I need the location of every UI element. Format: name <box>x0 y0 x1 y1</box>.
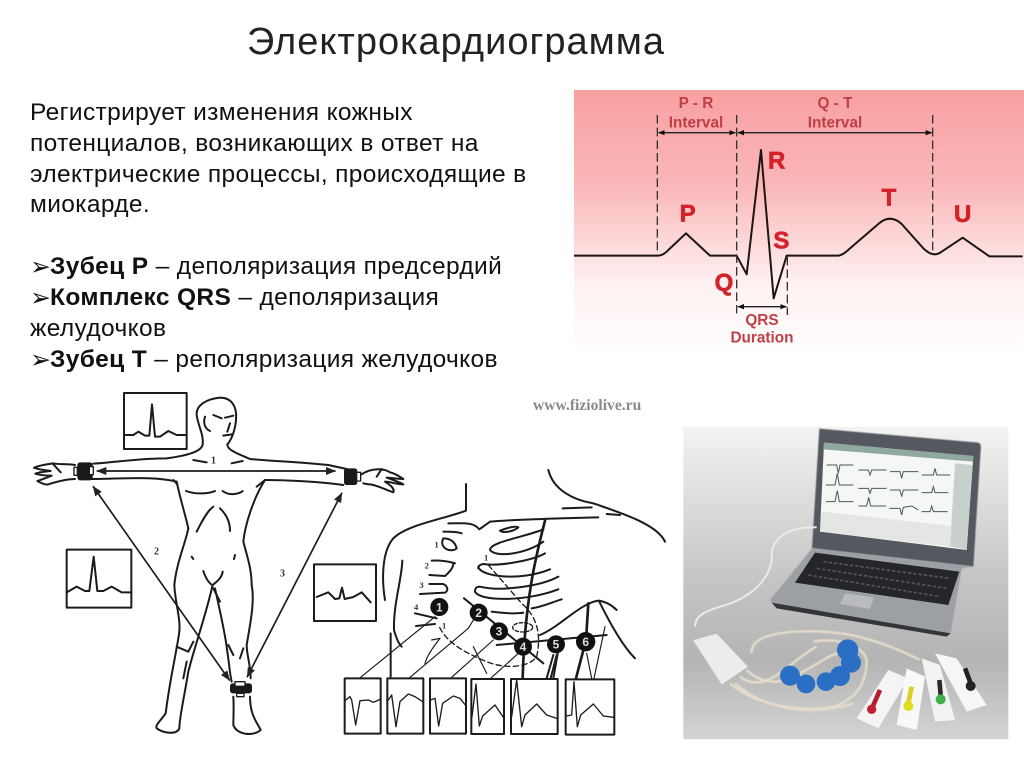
lead arrows <box>97 468 335 473</box>
lead numbers: 2 <box>154 546 159 557</box>
intro text: Регистрирует изменения кожных <box>30 99 413 126</box>
interval dashed guides <box>657 115 933 315</box>
trace box V3 <box>430 678 466 734</box>
bullet list: waves: ➢ <box>30 252 51 281</box>
bullet list: waves: Зубец Т – реполяризация желудочков <box>50 346 498 373</box>
torso outline <box>383 470 665 677</box>
watermark: www.fiziolive.ru <box>533 397 642 414</box>
trace box V4 <box>471 679 504 734</box>
rib numbers: 1 <box>484 553 488 563</box>
intro text: потенциалов, возникающих в ответ на <box>30 130 479 157</box>
interval labels: QRS <box>745 312 779 329</box>
colour-coded limb clips <box>857 653 987 730</box>
amplifier box <box>693 633 748 685</box>
hands <box>34 463 75 484</box>
wave letters: U <box>954 201 971 228</box>
trace box V1 <box>345 678 381 734</box>
rib numbers: 1 <box>434 539 439 549</box>
lead numbers: 3 <box>280 568 285 579</box>
face and torso details <box>173 415 265 678</box>
interval labels: P - R <box>679 95 713 112</box>
keyboard <box>795 553 959 605</box>
chart: ECG wave diagram <box>574 90 1024 357</box>
body outline <box>92 398 347 734</box>
wave letters: P <box>680 201 696 228</box>
photo backdrop <box>683 427 1008 739</box>
laptop base <box>770 548 973 634</box>
electrodes 1-6: 1 <box>436 600 443 614</box>
lead numbers: 1 <box>211 455 216 466</box>
interval labels: Interval <box>669 114 723 131</box>
USB cable <box>695 527 817 627</box>
spine and lead axes <box>523 521 545 678</box>
interval labels: Interval <box>808 114 862 131</box>
electrodes 1-6: 5 <box>553 638 560 652</box>
title: Электрокардиограмма <box>247 21 665 63</box>
rib numbers: 4 <box>414 602 419 612</box>
laptop screen <box>820 443 973 550</box>
interval labels: Duration <box>730 330 794 347</box>
intro text: миокарде. <box>30 191 150 218</box>
laptop lid <box>812 429 981 567</box>
trace box V5 <box>511 679 558 734</box>
lead wires <box>730 631 920 710</box>
bullet list: waves <box>30 252 502 374</box>
lead numbers <box>154 455 285 579</box>
intro text: электрические процессы, происходящие в <box>30 161 527 188</box>
heart outline dashed <box>439 565 539 666</box>
rib numbers: 3 <box>419 580 424 590</box>
trace box V6 <box>566 679 614 735</box>
electrodes 1-6 <box>430 598 595 656</box>
interval labels <box>669 95 862 347</box>
blue electrodes <box>780 639 861 693</box>
interval arrows <box>659 133 932 307</box>
illustration: limb leads on human figure <box>34 393 403 734</box>
bullet list: waves: желудочков <box>30 315 166 342</box>
wave letters <box>680 147 971 297</box>
rib numbers <box>414 539 488 631</box>
intro text <box>30 99 527 218</box>
lead connector lines <box>361 617 605 678</box>
electrodes 1-6: 2 <box>475 606 482 620</box>
photo: laptop with ECG electrodes <box>683 427 1008 739</box>
trace box V2 <box>387 678 423 734</box>
ribs <box>415 527 562 626</box>
rib numbers: 1 <box>442 621 446 631</box>
electrodes <box>77 462 357 693</box>
electrodes 1-6: 6 <box>582 635 589 649</box>
trackpad <box>840 593 874 609</box>
bullet list: waves: Зубец Р – деполяризация предсердий <box>50 253 502 280</box>
interval labels: Q - T <box>818 95 853 112</box>
illustration: chest leads V1-V6 <box>345 470 665 735</box>
bullet list: waves: ➢ <box>30 283 51 312</box>
wave letters: T <box>882 184 897 211</box>
electrodes 1-6: 3 <box>496 625 503 639</box>
wave letters: S <box>773 227 789 254</box>
bullet list: waves: Комплекс QRS – деполяризация <box>50 284 439 311</box>
trace box: lead III <box>314 564 376 621</box>
bullet list: waves: ➢ <box>30 345 51 374</box>
trace box: lead I <box>124 393 187 449</box>
rib numbers: 2 <box>425 560 429 570</box>
electrodes 1-6: 4 <box>520 640 527 654</box>
wave letters: R <box>768 147 785 174</box>
wave letters: Q <box>715 270 733 297</box>
ECG trace <box>574 150 1023 298</box>
trace box: lead II <box>67 550 131 608</box>
